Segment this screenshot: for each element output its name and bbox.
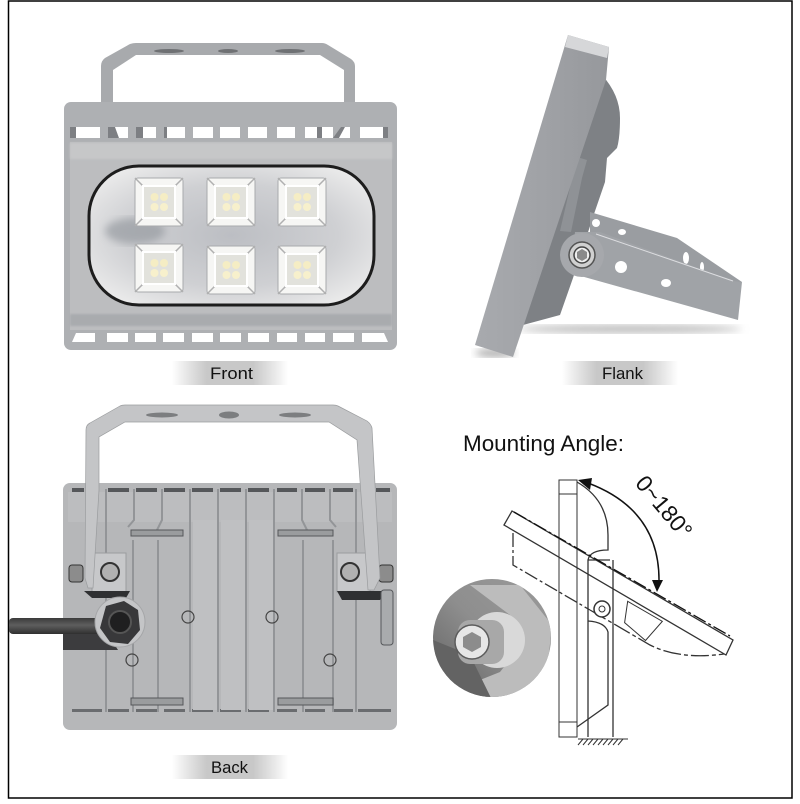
angle arc (588, 483, 659, 582)
vertical ribs (106, 489, 356, 712)
back housing (63, 483, 397, 730)
bracket upper holes (592, 219, 704, 272)
keyholes (126, 611, 336, 666)
pivot bolt (560, 233, 604, 277)
label: Front (172, 361, 288, 385)
arrowhead bottom (652, 580, 663, 592)
cable gland nut (95, 597, 145, 647)
top vent wedges (70, 127, 388, 138)
label: Flank (562, 361, 678, 385)
pivot bolt (594, 601, 610, 617)
front mounting bracket (101, 43, 355, 104)
LED module bottom right (278, 246, 326, 294)
label: Back: Back (211, 758, 248, 777)
rear housing fins (523, 75, 620, 325)
label: Back (172, 755, 288, 779)
back mounting bracket (85, 405, 380, 590)
tilted lamp bracket (615, 601, 662, 643)
angle label: 0~180° (630, 470, 698, 543)
panel: front view of flood light (64, 43, 397, 350)
bracket hinge left (69, 553, 130, 598)
bracket outer face (570, 232, 742, 320)
LED module bottom middle (207, 246, 255, 294)
flank housing (475, 35, 609, 357)
LED module top left (135, 178, 183, 226)
ground shadow (518, 325, 742, 333)
LED module bottom left (135, 244, 183, 292)
bracket holes (615, 261, 671, 287)
front housing (64, 102, 397, 350)
LED module top right (278, 178, 326, 226)
ground hatching (578, 739, 628, 745)
center strips (193, 520, 273, 710)
heading: Mounting Angle: Mounting Angle: (463, 431, 624, 456)
side slot (381, 590, 393, 645)
label: Front: Front (210, 364, 253, 383)
diagram: mounting angle (504, 478, 733, 745)
bottom vent slots (72, 333, 388, 342)
rear profile lower (577, 621, 608, 727)
inset: hex bolt close-up (433, 579, 552, 700)
clips (131, 530, 333, 705)
power cable (9, 618, 115, 634)
lens with gasket (89, 166, 374, 305)
bracket inner wall (590, 212, 742, 285)
bracket holes (146, 412, 311, 418)
panel: back view of flood light (9, 405, 397, 730)
top vent slots (76, 127, 383, 138)
front panel glass frame (70, 142, 392, 330)
arrowhead top (578, 478, 592, 490)
top fin slots (72, 488, 390, 492)
label: Flank: Flank (602, 364, 643, 383)
bottom fin slots (72, 709, 391, 712)
lens reflection (105, 218, 165, 244)
vertical lamp outline (559, 480, 577, 737)
bracket holes (154, 49, 305, 53)
cable strain relief (63, 634, 118, 650)
panel: flank view of flood light (475, 35, 742, 357)
rear profile upper (577, 482, 613, 737)
LED module top middle (207, 178, 255, 226)
bracket hinge right (337, 553, 393, 600)
tilted lamp outline (504, 511, 733, 655)
